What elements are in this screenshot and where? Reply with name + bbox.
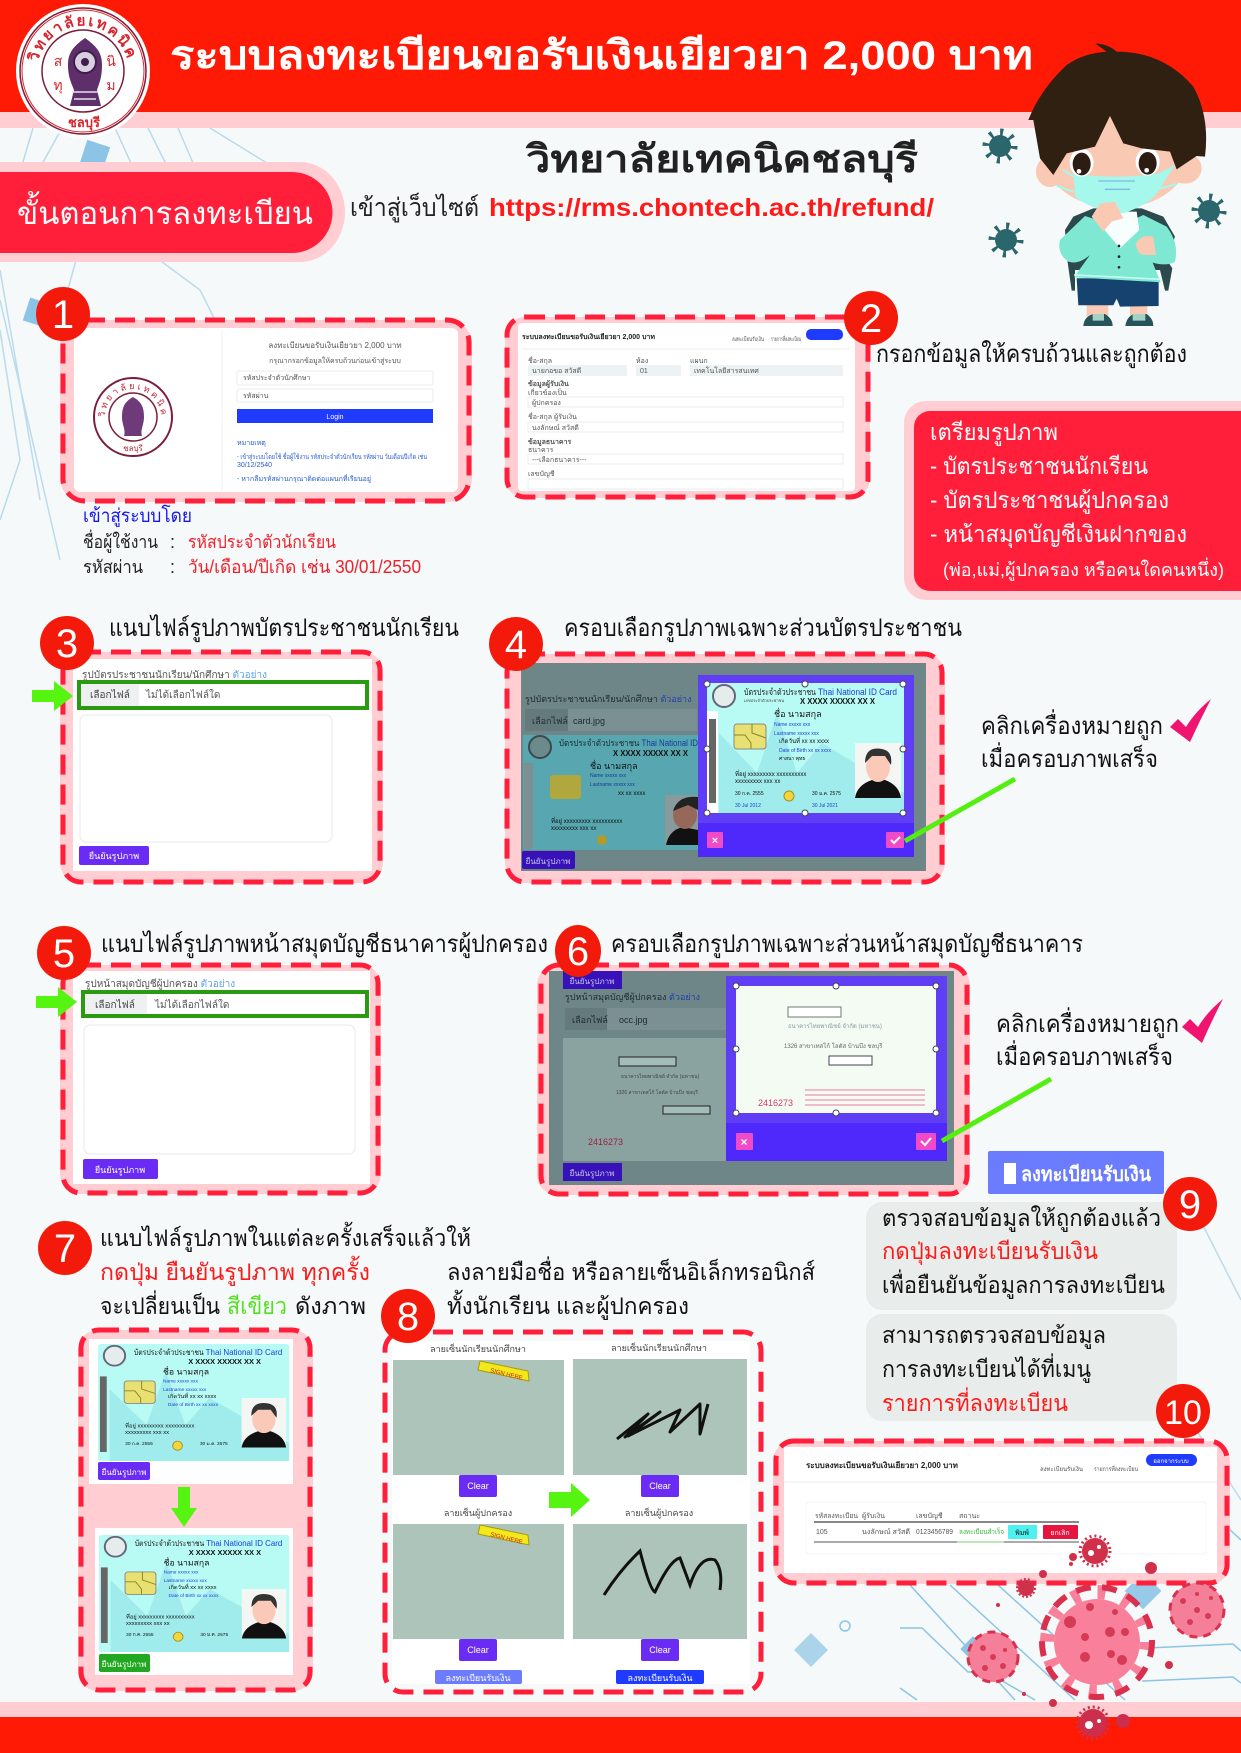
panel: step 2 form: ---เลือกธนาคาร---	[532, 456, 587, 464]
dimmed id card	[523, 735, 698, 850]
login instructions text: เข้าสู่ระบบโดย	[83, 504, 192, 527]
results table: ผู้รับเงิน	[862, 1512, 885, 1520]
panel: step 2 form: 01	[640, 368, 648, 375]
panel: step 1 login: รหัสประจำตัวนักศึกษา	[243, 373, 310, 382]
register buttons: ลงทะเบียนรับเงิน	[627, 1673, 693, 1683]
id card after: ชื่อ นามสกุล	[164, 1557, 209, 1568]
id card after: xxxxxxxxx xxx xx	[126, 1621, 170, 1627]
confirm button dimmed: ยืนยันรูปภาพ	[525, 857, 570, 867]
id card after: Name xxxxx xxx	[164, 1570, 199, 1575]
lower circuit lines	[840, 1527, 1241, 1700]
file input highlighted: ไม่ได้เลือกไฟล์ใด	[145, 689, 220, 701]
panel: step 4 crop card: card.jpg	[573, 716, 605, 726]
results table: นงลักษณ์ สวัสดี	[862, 1528, 910, 1536]
badge 8: 8	[397, 1295, 419, 1339]
clear buttons: Clear	[467, 1645, 489, 1655]
register button: ลงทะเบียนรับเงิน	[1021, 1163, 1151, 1186]
id card before: ที่อยู่ xxxxxxxxx xxxxxxxxxx	[125, 1422, 195, 1430]
step 8 instructions: ทั้งนักเรียน และผู้ปกครอง	[447, 1290, 689, 1320]
id card before: ชื่อ นามสกุล	[163, 1366, 209, 1377]
register button	[988, 1151, 1164, 1194]
step 8 instructions: ลงลายมือชื่อ หรือลายเซ็นอิเล็กทรอนิกส์	[447, 1256, 815, 1285]
panel: step 2 form	[505, 317, 870, 498]
panel: step 6 crop bank book: รูปหน้าสมุดบัญชีผู้ปกครอง ตัวอย่าง	[565, 992, 700, 1003]
purple crop dialog: ธนาคารไทยพาณิชย์ จำกัด (มหาชน)	[788, 1022, 882, 1030]
step 7 instructions: ดังภาพ	[295, 1293, 366, 1319]
step 7 instructions: สีเขียว	[227, 1293, 287, 1319]
panel: step 4 crop card: รูปบัตรประชาชนนักเรียน/นักศึกษา ตัวอย่าง	[525, 694, 691, 705]
dimmed id card: บัตรประจำตัวประชาชน Thai National ID	[559, 738, 698, 748]
step 6 heading: ครอบเลือกรูปภาพเฉพาะส่วนหน้าสมุดบัญชีธนาคาร	[611, 931, 1083, 959]
badge 3	[40, 616, 94, 670]
panel: step 1 login	[60, 318, 472, 504]
virus illustrations	[968, 1536, 1224, 1739]
id card before: 30 ม.ค. 2575	[200, 1441, 228, 1446]
dimmed bank book: ธนาคารไทยพาณิชย์ จำกัด (มหาชน)	[621, 1073, 700, 1080]
id card before: Date of Birth xx xx xxxx	[168, 1402, 219, 1407]
cropped id card: 30 Jul 2021	[812, 803, 838, 809]
college logo: วิทยาลัยเทคนิค	[26, 14, 134, 60]
signature pad empty top: SIGN HERE	[490, 1368, 523, 1382]
panel: step 2 form: ธนาคาร	[528, 447, 554, 454]
clear buttons: Clear	[649, 1481, 671, 1491]
login button: Login	[326, 414, 344, 421]
large virus	[1042, 1587, 1152, 1697]
panel: step 2 form: นงลักษณ์ สวัสดี	[532, 424, 579, 432]
arrow	[36, 987, 77, 1017]
purple crop dialog	[698, 675, 914, 857]
arrow: right	[549, 1483, 590, 1517]
panel: step 2 form: ผู้ปกครอง	[532, 399, 561, 407]
step 3 heading: แนบไฟล์รูปภาพบัตรประชาชนนักเรียน	[109, 614, 459, 643]
college logo: ส	[54, 53, 63, 69]
dimmed id card: X XXXX XXXXX XX X	[613, 749, 689, 758]
panel: step 2 form: นายกอขอ สวัสดี	[532, 367, 581, 375]
step 7 instructions: แนบไฟล์รูปภาพในแต่ละครั้งเสร็จแล้วให้	[100, 1222, 471, 1252]
callout: click checkmark: เมื่อครอบภาพเสร็จ	[981, 742, 1158, 773]
dimmed id card: ชื่อ นามสกุล	[590, 759, 638, 772]
panel: step 2 form: เทคโนโลยีสารสนเทศ	[694, 366, 759, 375]
panel: step 3 upload: รูปบัตรประชาชนนักเรียน/นักศึกษา ตัวอย่าง	[82, 669, 267, 681]
arrow: green pointer to accept	[905, 779, 1015, 841]
small college logo	[93, 377, 173, 457]
id card after	[99, 1535, 289, 1652]
panel: step 2 form: ห้อง	[636, 357, 648, 365]
panel: step 1 login: - เข้าสู่ระบบโดยใช้ ชื่อผู้ใช้งาน รหัสประจำตัวนักเรียน รหัสผ่าน วันเดือนปีเกิด เช่น	[237, 452, 427, 461]
results table: ลงทะเบียนสำเร็จ	[959, 1527, 1004, 1536]
panel: step 1 login: - หากลืมรหัสผ่านกรุณาติดต่อแผนกที่เรียนอยู่	[237, 474, 371, 483]
panel: prepare images: - บัตรประชาชนนักเรียน	[930, 453, 1148, 479]
panel: step 6 crop bank book: occ.jpg	[619, 1015, 648, 1025]
panel: step 6 crop bank book	[537, 965, 970, 1195]
green confirm button	[99, 1654, 150, 1672]
badge 2	[844, 291, 898, 345]
website instruction: https://rms.chontech.ac.th/refund/	[489, 194, 934, 222]
results table: ยกเลิก	[1050, 1529, 1070, 1537]
info box: confirm data: ตรวจสอบข้อมูลให้ถูกต้องแล้ว	[882, 1205, 1161, 1232]
panel: step 5 upload: รูปหน้าสมุดบัญชีผู้ปกครอง ตัวอย่าง	[85, 978, 235, 990]
step 5 heading: แนบไฟล์รูปภาพหน้าสมุดบัญชีธนาคารผู้ปกครอง	[101, 930, 548, 959]
dimmed id card: ที่อยู่ xxxxxxxxx xxxxxxxxxx	[551, 817, 622, 825]
panel: step 10 list: ออกจากระบบ	[1153, 1458, 1189, 1465]
panel: step 8 signatures	[385, 1332, 761, 1692]
step 7 instructions: กดปุ่ม ยืนยันรูปภาพ ทุกครั้ง	[100, 1256, 370, 1286]
panel: step 1 login: กรุณากรอกข้อมูลให้ครบถ้วนก่อนเข้าสู่ระบบ	[269, 356, 401, 365]
badge 10: 10	[1164, 1394, 1202, 1432]
confirm button	[79, 846, 149, 865]
login instructions text: :	[170, 532, 175, 552]
cropped id card: Lastname xxxxx xxx	[774, 731, 819, 737]
badge 1: 1	[52, 293, 74, 337]
cropped id card	[707, 683, 904, 813]
callout: click checkmark: คลิกเครื่องหมายถูก	[981, 709, 1163, 741]
login instructions text: รหัสประจำตัวนักเรียน	[188, 532, 336, 552]
file input highlighted	[83, 992, 367, 1016]
panel: step 7 cards before and after	[78, 1330, 313, 1691]
file input highlighted	[79, 682, 367, 708]
id card before	[98, 1344, 289, 1461]
badge 7	[38, 1221, 92, 1275]
icon: pink checkmark	[1170, 699, 1211, 742]
dimmed bank book: 2416273	[588, 1137, 623, 1147]
arrow: down	[171, 1487, 197, 1527]
badge 4: 4	[505, 623, 527, 667]
college logo	[16, 4, 150, 138]
panel: step 8 signatures: ลายเซ็นนักเรียนนักศึกษา	[611, 1341, 707, 1353]
signature pad signed top	[573, 1359, 747, 1475]
cropped id card: 30 Jul 2012	[735, 803, 761, 809]
id card before: Name xxxxx xxx	[163, 1379, 199, 1384]
results table: พิมพ์	[1015, 1529, 1029, 1537]
id card after: X XXXX XXXXX XX X	[189, 1548, 261, 1557]
callout: click checkmark: คลิกเครื่องหมายถูก	[996, 1007, 1179, 1039]
college logo: ชลบุรี	[68, 115, 100, 131]
medium virus right	[1170, 1583, 1224, 1637]
dimmed bank book	[563, 1038, 726, 1161]
login instructions text: ชื่อผู้ใช้งาน	[83, 529, 158, 553]
signature pad empty bottom	[393, 1524, 564, 1639]
panel: prepare images	[904, 401, 1241, 600]
badge 5	[37, 926, 91, 980]
info box: confirm data: กดปุ่มลงทะเบียนรับเงิน	[882, 1238, 1098, 1265]
badge 6	[555, 925, 601, 977]
login button	[237, 409, 433, 423]
accept button	[886, 832, 904, 848]
arrow	[32, 681, 73, 711]
panel: step 2 form: ชื่อ-สกุล ผู้รับเงิน	[528, 412, 577, 421]
cropped id card: บัตรประจำตัวประชาชน	[744, 687, 816, 697]
clear buttons	[459, 1475, 679, 1661]
panel: step 5 upload	[60, 965, 381, 1194]
info box: confirm data: เพื่อยืนยันข้อมูลการลงทะเบียน	[882, 1269, 1165, 1299]
boy character with mask	[1028, 43, 1206, 326]
results table	[806, 1502, 1206, 1554]
step 4 heading: ครอบเลือกรูปภาพเฉพาะส่วนบัตรประชาชน	[564, 615, 962, 643]
file input highlighted: เลือกไฟล์	[90, 689, 130, 701]
green confirm button: ยืนยันรูปภาพ	[101, 1660, 146, 1670]
icon: pink checkmark	[1182, 999, 1223, 1043]
badge 7: 7	[54, 1227, 76, 1271]
id card after: Date of Birth xx xx xxxx	[168, 1593, 219, 1598]
confirm button dimmed	[522, 851, 575, 869]
cropped id card: เกิดวันที่ xx xx xxxx	[779, 737, 829, 745]
panel: step 1 login: หมายเหตุ	[237, 440, 266, 447]
website instruction	[350, 192, 934, 223]
panel: step 8 signatures: ลายเซ็นผู้ปกครอง	[625, 1506, 693, 1519]
step 7 instructions	[100, 1222, 471, 1319]
dimmed id card: xxxxxxxxx xxx xx	[551, 826, 596, 832]
id card after: Lastname xxxxx xxx	[164, 1578, 207, 1583]
badge 2: 2	[860, 297, 882, 341]
germ icons near boy	[986, 132, 1223, 254]
results table: 105	[816, 1529, 828, 1536]
cropped id card: Name xxxxx xxx	[774, 722, 811, 728]
panel: step 2 form: ระบบลงทะเบียนขอรับเงินเยียวยา 2,000 บาท	[522, 333, 655, 341]
signature pad signed bottom	[573, 1524, 747, 1639]
results table: สถานะ	[959, 1513, 980, 1520]
signature pad empty bottom: SIGN HERE	[490, 1532, 523, 1546]
header title: ระบบลงทะเบียนขอรับเงินเยียวยา 2,000 บาท	[170, 34, 1033, 78]
callout: click checkmark	[996, 1007, 1179, 1071]
id card before: X XXXX XXXXX XX X	[188, 1357, 261, 1366]
step 7 instructions: จะเปลี่ยนเป็น	[100, 1290, 220, 1319]
panel: prepare images: (พ่อ,แม่,ผู้ปกครอง หรือคนใดคนหนึ่ง)	[943, 557, 1224, 581]
badge 9	[1163, 1177, 1217, 1231]
accept button	[916, 1133, 936, 1150]
small college logo: วิทยาลัยเทคนิค	[98, 382, 166, 416]
info box: check menu	[866, 1314, 1177, 1421]
clear buttons: Clear	[467, 1481, 489, 1491]
panel: step 1 login: รหัสผ่าน	[243, 392, 269, 400]
dimmed bank book: 1326 สาขาเทสโก้ โลตัส บ้านบึง ชลบุรี	[616, 1089, 698, 1096]
panel: step 10 list: ลงทะเบียนรับเงิน	[1040, 1465, 1083, 1473]
id card before: Lastname xxxxx xxx	[163, 1387, 207, 1392]
header band	[0, 0, 1241, 128]
login instructions text: วัน/เดือน/ปีเกิด เช่น 30/01/2550	[188, 557, 421, 577]
panel: step 10 list: รายการที่ลงทะเบียน	[1094, 1465, 1138, 1473]
panel: step 10 list: ระบบลงทะเบียนขอรับเงินเยียวยา 2,000 บาท	[806, 1460, 958, 1470]
callout: click checkmark	[981, 709, 1163, 773]
college logo: ม	[106, 77, 116, 93]
id card before: 30 ก.ค. 2555	[125, 1441, 153, 1446]
step 8 instructions	[447, 1256, 815, 1320]
clear buttons: Clear	[649, 1645, 671, 1655]
step 2 instruction: กรอกข้อมูลให้ครบถ้วนและถูกต้อง	[876, 340, 1187, 369]
dimmed id card: xx xx xxxx	[618, 791, 645, 797]
purple crop dialog: 1326 สาขาเทสโก้ โลตัส บ้านบึง ชลบุรี	[784, 1042, 883, 1050]
top confirm button	[563, 971, 622, 989]
badge 3: 3	[56, 622, 78, 666]
cropped id card: ที่อยู่ xxxxxxxxx xxxxxxxxxx	[735, 770, 806, 778]
cropped id card: Date of Birth xx xx xxxx	[779, 748, 831, 754]
small dark viruses	[996, 1536, 1173, 1739]
info box: confirm data	[866, 1202, 1177, 1310]
id card after: บัตรประจำตัวประชาชน	[135, 1538, 204, 1548]
cropped id card: 30 ก.ค. 2555	[735, 791, 764, 797]
cancel button: ×	[712, 835, 718, 847]
id card after: เกิดวันที่ xx xx xxxx	[168, 1583, 217, 1591]
signature pad empty top	[393, 1360, 564, 1475]
register buttons: ลงทะเบียนรับเงิน	[445, 1673, 511, 1683]
results table: รหัสลงทะเบียน	[815, 1512, 858, 1520]
id card before: Thai National ID Card	[206, 1347, 283, 1357]
callout: click checkmark: เมื่อครอบภาพเสร็จ	[996, 1040, 1173, 1071]
confirm button	[83, 1159, 158, 1179]
medium virus left	[968, 1632, 1018, 1682]
info box: check menu: สามารถตรวจสอบข้อมูล	[882, 1322, 1106, 1349]
panel: step 1 login: ลงทะเบียนขอรับเงินเยียวยา 2,000 บาท	[268, 341, 402, 350]
badge 9: 9	[1179, 1183, 1201, 1227]
results table: เลขบัญชี	[916, 1512, 943, 1520]
panel: step 8 signatures: ลายเซ็นนักเรียนนักศึกษา	[430, 1342, 526, 1354]
cropped id card: xxxxxxxxx xxx xx	[735, 779, 780, 785]
cropped id card: 30 ม.ค. 2575	[812, 791, 841, 797]
panel: step 4 crop card: เลือกไฟล์	[532, 715, 568, 726]
id card before: บัตรประจำตัวประชาชน	[134, 1347, 204, 1357]
cropped id card: ศาสนา พุทธ	[779, 756, 805, 762]
badge 4	[489, 617, 543, 671]
panel: step 2 form: ข้อมูลผู้รับเงิน	[528, 379, 569, 389]
purple confirm button: ยืนยันรูปภาพ	[101, 1468, 146, 1478]
panel: step 2 form: ข้อมูลธนาคาร	[528, 437, 571, 447]
panel: step 10 list	[773, 1441, 1230, 1584]
crop handles	[733, 983, 939, 1116]
panel: step 2 form: เกี่ยวข้องเป็น	[528, 388, 567, 397]
dimmed id card: Lastname xxxxx xxx	[590, 782, 635, 788]
panel: prepare images: เตรียมรูปภาพ	[930, 419, 1058, 446]
id card after: 30 ม.ค. 2575	[200, 1632, 229, 1637]
badge 1	[36, 287, 90, 341]
register buttons	[435, 1670, 704, 1684]
panel: prepare images: - หน้าสมุดบัญชีเงินฝากของ	[930, 521, 1187, 548]
panel: step 2 form: เลขบัญชี	[528, 470, 555, 478]
decorative diamonds	[23, 140, 1161, 1667]
college logo: ทุ	[53, 77, 63, 94]
badge 6: 6	[567, 930, 589, 974]
results table: 0123456789	[916, 1529, 953, 1536]
panel: step 4 crop card	[505, 654, 945, 883]
bottom confirm button	[563, 1163, 622, 1181]
subtitle: college name: วิทยาลัยเทคนิคชลบุรี	[525, 139, 919, 183]
panel: step 2 form: ลงทะเบียนรับเงิน	[732, 335, 764, 343]
footer band	[0, 1702, 1241, 1753]
panel: step 3 upload	[60, 652, 383, 883]
file input highlighted: เลือกไฟล์	[95, 999, 135, 1011]
badge 8	[381, 1289, 435, 1343]
panel: step 2 form: ชื่อ-สกุล	[528, 356, 552, 365]
id card before: xxxxxxxxx xxx xx	[125, 1430, 169, 1436]
top confirm button: ยืนยันรูปภาพ	[569, 977, 614, 987]
purple crop dialog	[726, 976, 947, 1161]
id card after: ที่อยู่ xxxxxxxxx xxxxxxxxxx	[126, 1613, 195, 1621]
bottom confirm button: ยืนยันรูปภาพ	[569, 1169, 614, 1179]
login instructions text: :	[170, 557, 175, 577]
badge 5: 5	[53, 932, 75, 976]
panel: step 2 form: รายการที่ลงทะเบียน	[771, 335, 801, 343]
background circuit lines	[0, 128, 1241, 1500]
cancel button	[736, 1133, 753, 1150]
steps pill heading: ขั้นตอนการลงทะเบียน	[17, 191, 313, 231]
panel: step 2 form: แผนก	[690, 358, 708, 365]
cropped id card: ชื่อ นามสกุล	[774, 707, 822, 720]
confirm button: ยืนยันรูปภาพ	[89, 851, 139, 862]
info box: check menu: การลงทะเบียนได้ที่เมนู	[882, 1353, 1091, 1383]
confirm button: ยืนยันรูปภาพ	[95, 1165, 145, 1176]
arrow: green pointer to accept	[942, 1079, 1051, 1141]
badge 10	[1156, 1384, 1210, 1438]
file input highlighted: ไม่ได้เลือกไฟล์ใด	[154, 999, 229, 1011]
steps pill heading	[0, 162, 345, 262]
cancel button: ×	[740, 1135, 748, 1149]
panel: prepare images: - บัตรประชาชนผู้ปกครอง	[930, 487, 1169, 514]
info box: check menu: รายการที่ลงทะเบียน	[882, 1387, 1068, 1416]
purple crop dialog: 2416273	[758, 1098, 793, 1108]
college logo: นิ	[106, 53, 116, 69]
login instructions text	[83, 504, 421, 577]
login instructions text: รหัสผ่าน	[83, 557, 143, 577]
dimmed id card: Name xxxxx xxx	[590, 773, 627, 779]
id card before: เกิดวันที่ xx xx xxxx	[168, 1392, 217, 1400]
purple confirm button	[98, 1462, 150, 1480]
id card after: 30 ก.ค. 2555	[126, 1632, 154, 1637]
panel: step 1 login: 30/12/2540	[237, 462, 272, 469]
website instruction: เข้าสู่เว็บไซต์	[350, 192, 479, 223]
panel: step 6 crop bank book: เลือกไฟล์	[572, 1014, 608, 1025]
cancel button	[707, 832, 723, 848]
id card after: Thai National ID Card	[206, 1538, 283, 1548]
small college logo: ชลบุรี	[123, 444, 144, 453]
cropped id card: X XXXX XXXXX XX X	[800, 697, 876, 706]
crop handles	[704, 681, 906, 816]
panel: step 8 signatures: ลายเซ็นผู้ปกครอง	[444, 1506, 512, 1519]
cropped id card: Thai National ID Card	[818, 687, 897, 697]
cropped id card: เลขประจำตัวประชาชน	[744, 698, 784, 703]
